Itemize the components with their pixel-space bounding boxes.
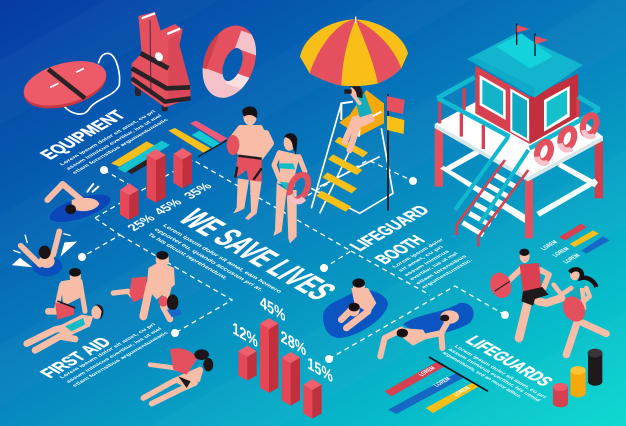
text: equipment description: etiam forensibus argumentumistic xyxy=(71,118,170,175)
icon: cylinders xyxy=(553,349,602,407)
chart base strips xyxy=(111,121,227,174)
text: we save lives headline: WE SAVE LIVES xyxy=(170,204,344,305)
text: lifeguard booth description: evertitur, ius ut mel xyxy=(409,251,461,281)
tower roof xyxy=(467,23,583,98)
labels: strip legend: LOREM xyxy=(433,376,453,388)
labels: strip legend xyxy=(417,366,472,397)
text: we save lives description xyxy=(146,224,283,294)
bar labels: rescue stats: 12% xyxy=(232,318,258,352)
icon: drowning swimmer xyxy=(13,231,75,276)
running man xyxy=(487,249,561,338)
tower house xyxy=(475,66,578,144)
icon: beach umbrella xyxy=(300,17,408,86)
bar chart: equipment xyxy=(120,148,192,220)
tower railing xyxy=(437,77,600,149)
text: lifeguards description: Lorem ipsum dolor sit amet, cu pri xyxy=(452,344,548,400)
text: first aid description: etiam forensibus argumentumistic xyxy=(71,331,170,388)
legend top right: LOREM xyxy=(551,246,572,258)
icon: life vest xyxy=(132,12,191,111)
text: lifeguards description: assum inimicus evertitur, his utmid xyxy=(446,348,542,403)
icon: first aid rescue breathing xyxy=(113,251,182,319)
icon: swimming rescue xyxy=(380,303,474,356)
text: equipment description: assum inimicus evertitur, ius ut mel xyxy=(65,113,165,171)
icon: lifeguard chair xyxy=(311,90,393,213)
icon: runners xyxy=(487,249,606,355)
icon: rescue board xyxy=(19,53,120,117)
running woman xyxy=(554,269,606,355)
top-right quadrant xyxy=(300,17,603,247)
icon: rescuer and swimmer lying xyxy=(143,348,213,404)
text: lifeguard booth heading xyxy=(345,202,434,267)
text: lifeguard booth description: etiam forensibus xyxy=(415,254,469,286)
text: equipment heading: EQUIPMENT xyxy=(35,107,130,162)
icon: lifeguards strips xyxy=(385,357,488,414)
bar labels: equipment: 45% xyxy=(150,197,185,217)
legend top right: LOREM xyxy=(540,240,560,251)
bottom-right quadrant xyxy=(323,202,610,414)
bar labels: rescue stats xyxy=(232,292,333,387)
text: lifeguards heading: LIFEGUARDS xyxy=(461,333,558,389)
bar labels: rescue stats: 28% xyxy=(281,326,306,360)
icon: lifeguard tower xyxy=(435,23,603,247)
text: lifeguard booth description: Lorem ipsum dolor xyxy=(391,238,446,269)
text: we save lives description: opportet eu, quando accusam pri at. xyxy=(152,228,265,293)
text: lifeguard booth heading: BOOTH xyxy=(370,232,429,267)
bar chart: rescue stats xyxy=(238,318,322,419)
icon: swimmer holding victim xyxy=(323,278,388,338)
bottom-left quadrant xyxy=(13,204,344,419)
legend top right xyxy=(540,224,610,265)
tower stairs xyxy=(455,137,528,247)
dashed connector lines xyxy=(78,160,509,363)
text: lifeguards description xyxy=(440,344,548,403)
text: lifeguards description: argumentumis, sed an mucor adhuc. xyxy=(440,351,524,399)
bar labels: equipment: 25% xyxy=(124,213,159,233)
text: equipment description: Lorem ipsum dolor sit amet, cu pri xyxy=(59,109,158,167)
text: first aid description: Lorem ipsum dolor sit amet, cu pri xyxy=(59,322,158,380)
tower deck xyxy=(435,102,603,181)
text: we save lives description: Lorem ipsum dolor sit amet, eam homero xyxy=(161,224,283,294)
bar labels: equipment xyxy=(124,181,215,233)
top-left quadrant xyxy=(19,12,312,243)
icon: female lifeguard xyxy=(273,133,312,243)
labels: strip legend: LOREM xyxy=(417,366,438,377)
icon: swimmer xyxy=(47,184,113,228)
tower life rings xyxy=(535,113,599,163)
icon: first aid chest compressions xyxy=(27,268,104,350)
icon: life ring xyxy=(202,26,256,98)
text: first aid description: assum inimicus evertitur, ius ut mel xyxy=(65,326,165,384)
icon: seated lifeguard xyxy=(344,84,372,150)
icon: flags xyxy=(387,94,405,211)
legend top right: LOREM xyxy=(562,253,582,265)
text: lifeguard booth description: assum inimicus xyxy=(403,249,452,277)
bar labels: rescue stats: 45% xyxy=(260,292,286,326)
text: we save lives description: Te his dicunt reprehendunt. xyxy=(146,233,229,281)
text: lifeguard booth heading: LIFEGUARD xyxy=(345,202,434,254)
bar labels: rescue stats: 15% xyxy=(307,353,333,387)
text: lifeguard booth description: sit amet, cu pri xyxy=(397,245,446,273)
text: equipment description xyxy=(59,109,170,175)
tower posts and beams xyxy=(435,128,603,238)
text: lifeguard booth description: argumentumistic. xyxy=(420,258,475,290)
text: lifeguard booth description xyxy=(391,238,475,290)
labels: strip legend: LOREM xyxy=(452,386,472,397)
text: first aid heading: FIRST AID xyxy=(35,334,116,381)
text: first aid description xyxy=(59,322,170,388)
icon: male lifeguard xyxy=(227,106,271,220)
bar labels: equipment: 35% xyxy=(180,181,215,201)
